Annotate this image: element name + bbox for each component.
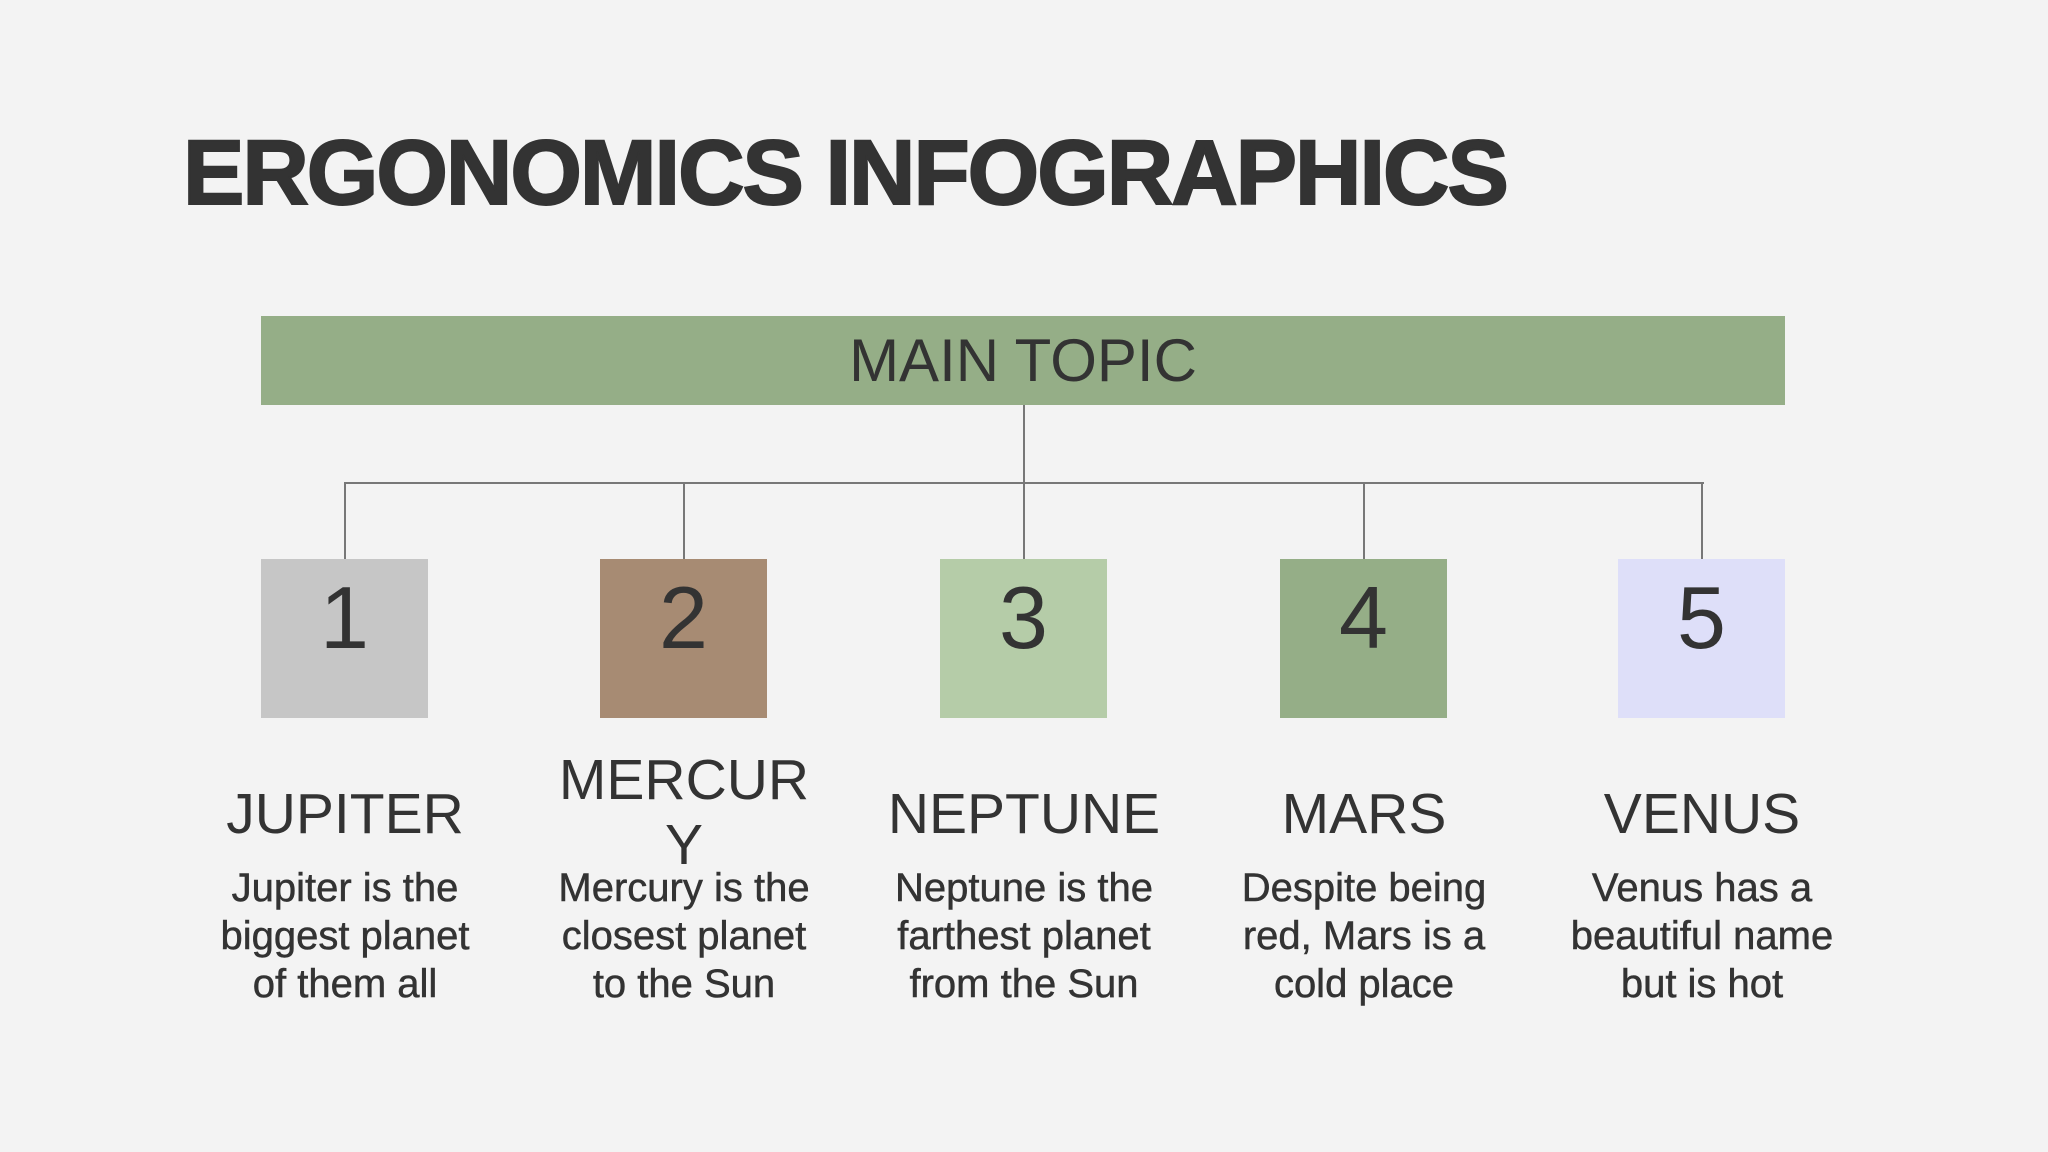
desc: Venus bbox=[1571, 866, 1833, 1006]
main topic bar: MAIN TOPIC bbox=[849, 327, 1197, 394]
desc: Neptune: farthest planet bbox=[897, 914, 1151, 958]
box 4 bbox=[1280, 559, 1447, 718]
title: ERGONOMICS INFOGRAPHICS bbox=[183, 122, 1507, 224]
desc: Mercury: Mercury is the bbox=[558, 866, 810, 910]
desc: Neptune: from the Sun bbox=[909, 962, 1138, 1006]
name: Mercury: MERCUR bbox=[559, 748, 809, 812]
connector lines bbox=[344, 405, 1704, 559]
main topic bar bbox=[261, 316, 1785, 405]
box 5: 5 bbox=[1677, 568, 1726, 667]
box 2: 2 bbox=[659, 568, 708, 667]
desc: Jupiter: Jupiter is the bbox=[232, 866, 458, 910]
name: Mercury: Y bbox=[665, 813, 703, 877]
desc: Venus: Venus has a bbox=[1592, 866, 1812, 910]
desc: Venus: beautiful name bbox=[1571, 914, 1833, 958]
name: Mercury bbox=[559, 748, 809, 877]
desc: Mars: red, Mars is a bbox=[1243, 914, 1485, 958]
box 3: 3 bbox=[999, 568, 1048, 667]
box 1: 1 bbox=[320, 568, 369, 667]
desc: Mercury: to the Sun bbox=[593, 962, 775, 1006]
box 4: 4 bbox=[1339, 568, 1388, 667]
box 5 bbox=[1618, 559, 1785, 718]
desc: Mars bbox=[1242, 866, 1486, 1006]
desc: Mars: Despite being bbox=[1242, 866, 1486, 910]
name: Venus: VENUS bbox=[1604, 782, 1800, 846]
box 1 bbox=[261, 559, 428, 718]
desc: Mercury: closest planet bbox=[562, 914, 806, 958]
desc: Neptune: Neptune is the bbox=[895, 866, 1153, 910]
box 2 bbox=[600, 559, 767, 718]
name: Mars: MARS bbox=[1282, 782, 1446, 846]
desc: Neptune bbox=[895, 866, 1153, 1006]
box 3 bbox=[940, 559, 1107, 718]
desc: Venus: but is hot bbox=[1621, 962, 1783, 1006]
desc: Mercury bbox=[558, 866, 810, 1006]
desc: Jupiter: biggest planet bbox=[220, 914, 470, 958]
desc: Jupiter bbox=[220, 866, 470, 1006]
desc: Mars: cold place bbox=[1274, 962, 1454, 1006]
name: Neptune: NEPTUNE bbox=[888, 782, 1160, 846]
name: Jupiter: JUPITER bbox=[226, 782, 464, 846]
desc: Jupiter: of them all bbox=[253, 962, 437, 1006]
